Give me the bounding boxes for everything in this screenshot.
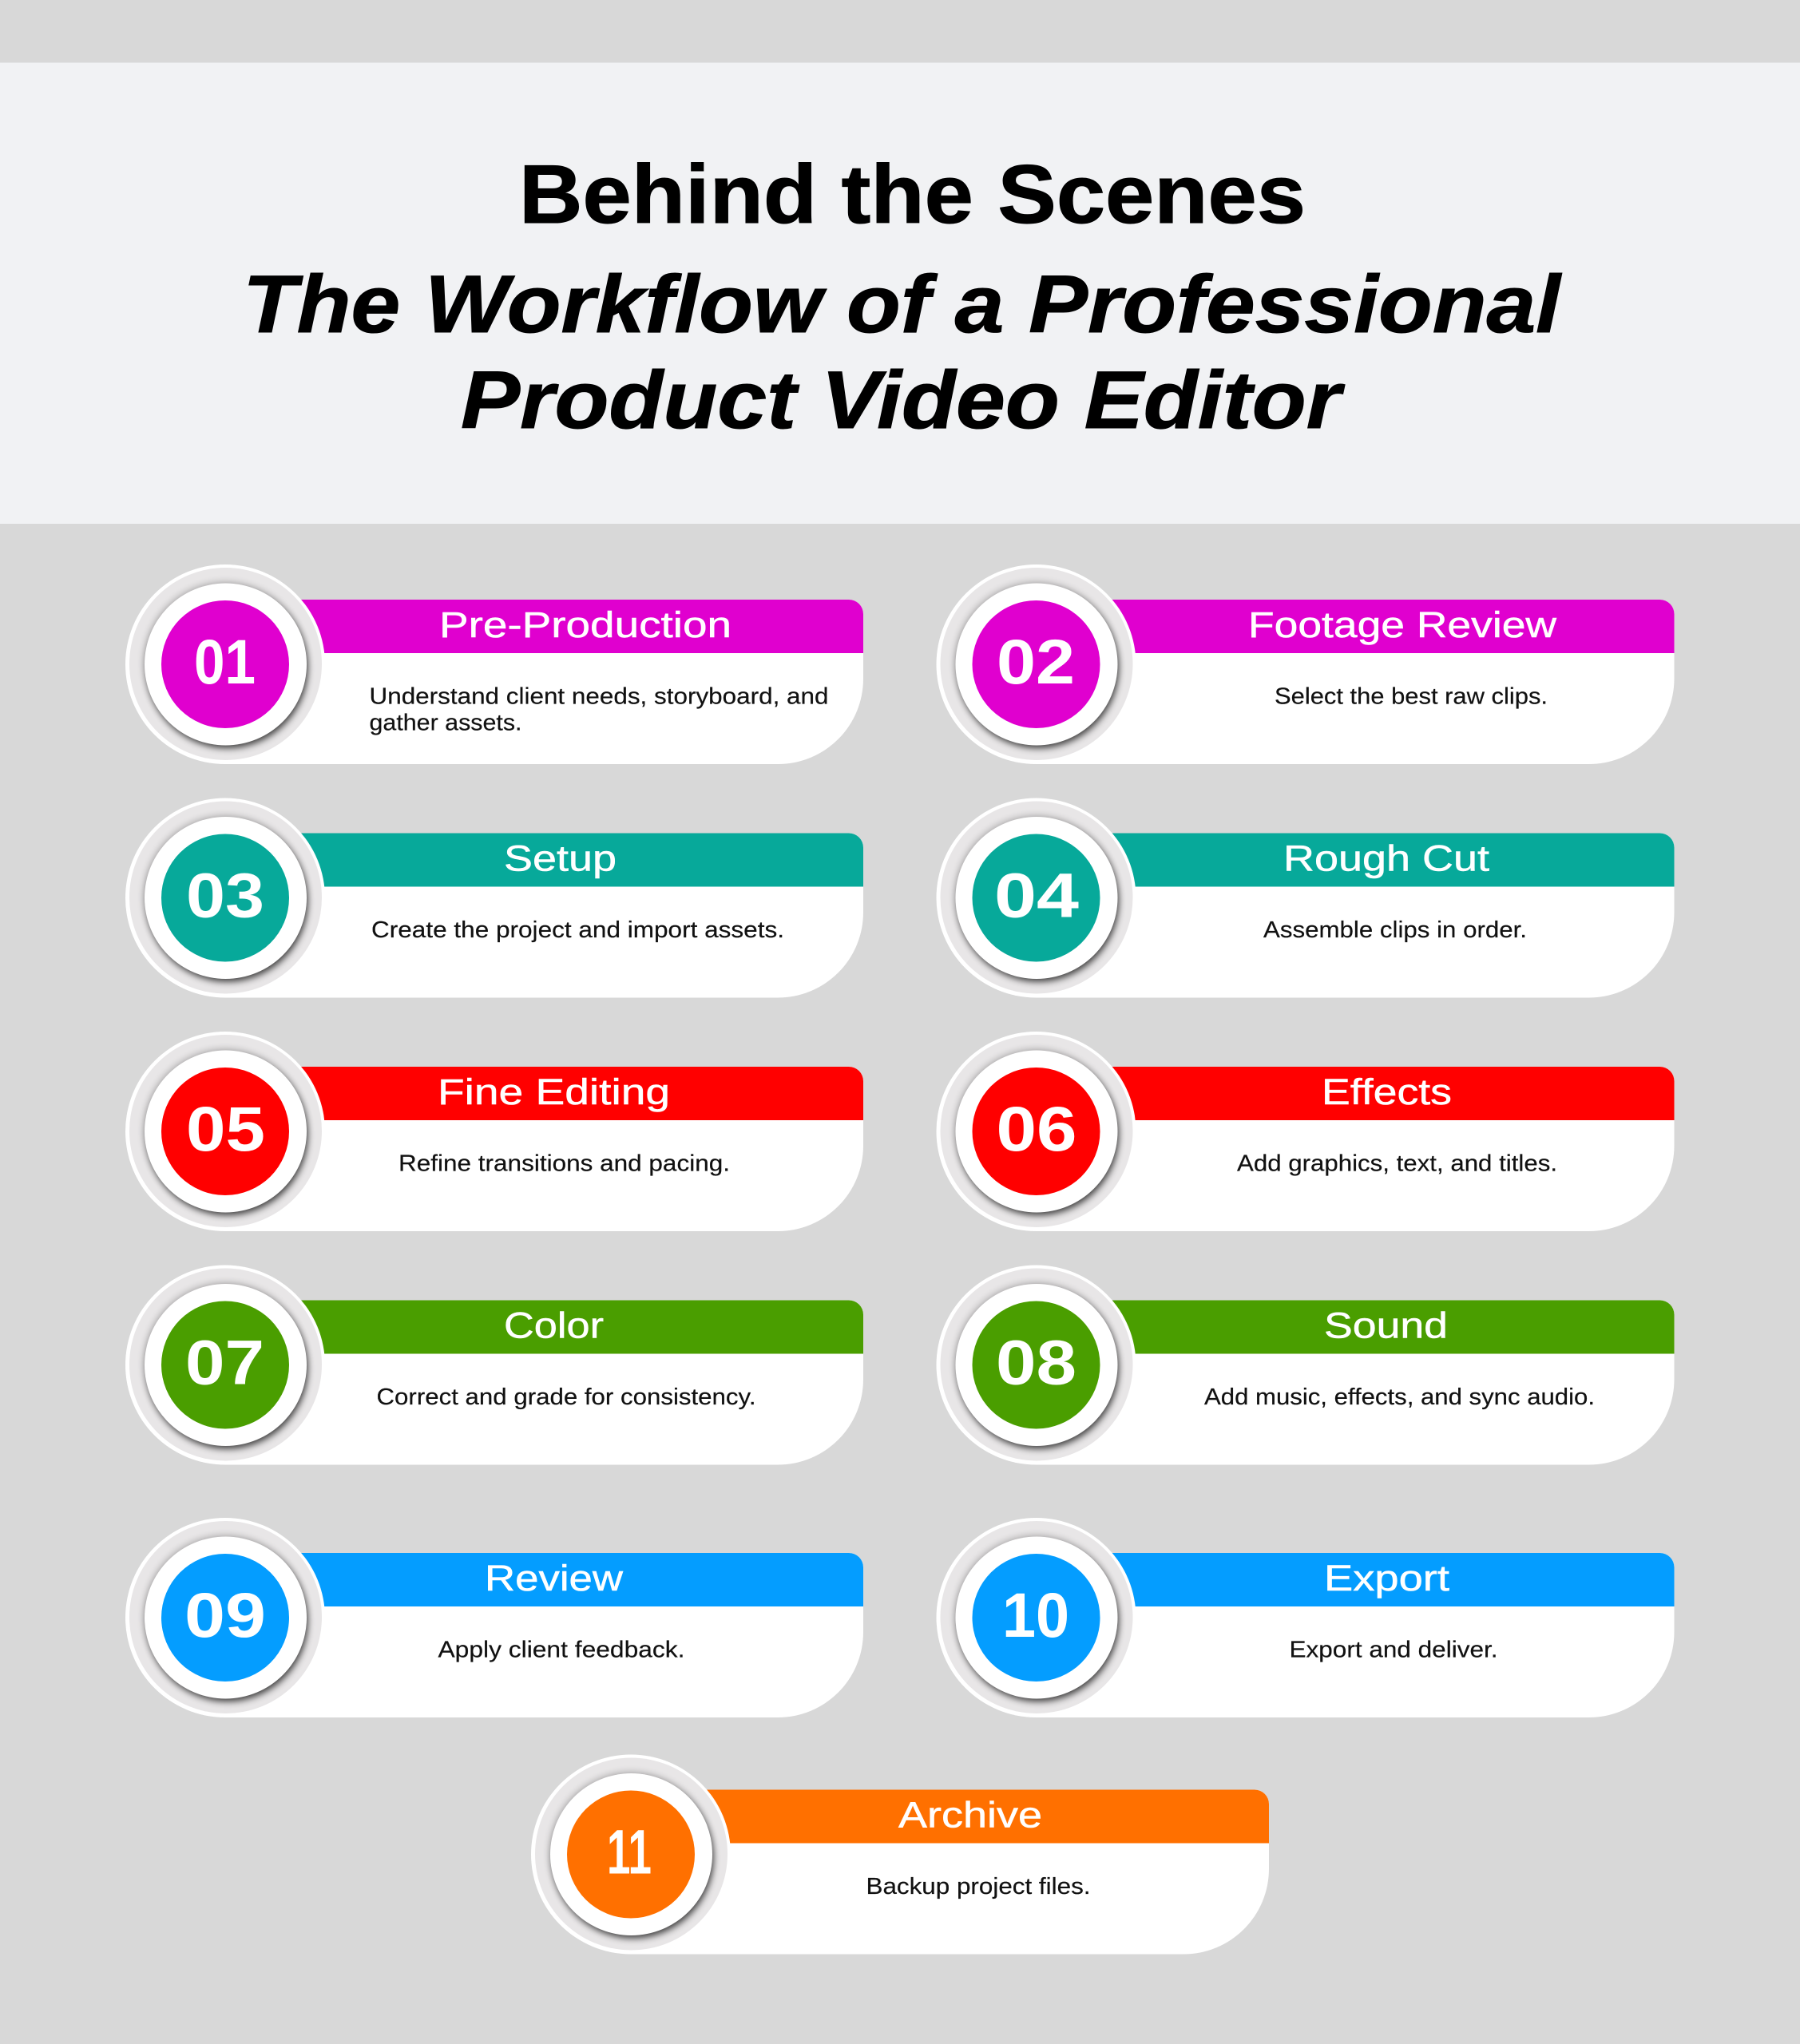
card 01: Pre-Production: 01 bbox=[194, 626, 256, 697]
card title: Archive bbox=[898, 1795, 1042, 1835]
number badge 07 bbox=[161, 1301, 289, 1429]
heading: Behind the Scenes: Behind the Scenes bbox=[519, 149, 1306, 241]
card description: Add graphics, text, and titles. bbox=[1237, 1151, 1557, 1177]
number badge 09 bbox=[161, 1554, 289, 1682]
card 05: Fine Editing: 05 bbox=[186, 1093, 265, 1164]
card title: Pre-Production bbox=[439, 604, 731, 645]
card 06: Effects bbox=[936, 1032, 1674, 1231]
card 09: Review bbox=[125, 1518, 863, 1717]
card 01: Pre-Production bbox=[125, 564, 863, 764]
card 03: Setup: 03 bbox=[186, 859, 264, 931]
number badge 08 bbox=[973, 1301, 1100, 1429]
card 04: Rough Cut: 04 bbox=[994, 859, 1079, 931]
number badge 10 bbox=[973, 1554, 1100, 1682]
card description: Export and deliver. bbox=[1289, 1637, 1498, 1662]
card title: Fine Editing bbox=[438, 1072, 670, 1112]
card description: Understand client needs, storyboard, and bbox=[369, 683, 829, 709]
subheading line 2: Product Video Editor bbox=[461, 355, 1346, 446]
card description: Create the project and import assets. bbox=[371, 917, 784, 943]
card title: Setup bbox=[504, 838, 617, 878]
card 11: Archive: 11 bbox=[607, 1816, 652, 1888]
subheading line 1: The Workflow of a Professional bbox=[243, 259, 1563, 350]
card 08: Sound bbox=[936, 1265, 1674, 1464]
card 04: Rough Cut bbox=[936, 798, 1674, 998]
number badge 03 bbox=[161, 834, 289, 961]
card 02: Footage Review bbox=[936, 564, 1674, 764]
ring 05 bbox=[125, 1032, 325, 1231]
card 11: Archive bbox=[531, 1755, 1269, 1955]
card 05: Fine Editing bbox=[125, 1032, 863, 1231]
header panel bbox=[0, 62, 1800, 524]
card title: Color bbox=[504, 1305, 604, 1346]
card 10: Export: 10 bbox=[1002, 1579, 1069, 1650]
ring 08 bbox=[936, 1265, 1136, 1464]
ring 04 bbox=[936, 798, 1136, 998]
card 07: Color: 07 bbox=[185, 1327, 264, 1397]
number badge 01 bbox=[161, 600, 289, 728]
card description: Assemble clips in order. bbox=[1263, 917, 1527, 943]
card description: Select the best raw clips. bbox=[1275, 683, 1548, 709]
card 07: Color bbox=[125, 1265, 863, 1464]
ring 06 bbox=[936, 1032, 1136, 1231]
number badge 06 bbox=[973, 1068, 1100, 1195]
number badge 04 bbox=[973, 834, 1100, 961]
card title: Review bbox=[485, 1558, 624, 1598]
number badge 02 bbox=[973, 600, 1100, 728]
card description: Refine transitions and pacing. bbox=[398, 1151, 730, 1177]
card description: Add music, effects, and sync audio. bbox=[1204, 1384, 1595, 1410]
card description: Apply client feedback. bbox=[438, 1637, 685, 1662]
card 10: Export bbox=[936, 1518, 1674, 1717]
title bbox=[243, 149, 1563, 446]
card description: gather assets. bbox=[369, 711, 522, 736]
ring 09 bbox=[125, 1518, 325, 1717]
card title: Effects bbox=[1322, 1072, 1452, 1112]
card 09: Review: 09 bbox=[184, 1579, 266, 1650]
card 08: Sound: 08 bbox=[996, 1327, 1076, 1397]
card 03: Setup bbox=[125, 798, 863, 998]
card title: Sound bbox=[1324, 1305, 1448, 1346]
number badge 11 bbox=[567, 1790, 695, 1918]
ring 10 bbox=[936, 1518, 1136, 1717]
card 02: Footage Review: 02 bbox=[997, 626, 1075, 697]
card description bbox=[369, 683, 829, 736]
card title: Footage Review bbox=[1248, 604, 1557, 645]
ring 03 bbox=[125, 798, 325, 998]
ring 11 bbox=[531, 1755, 731, 1955]
ring 02 bbox=[936, 564, 1136, 764]
number badge 05 bbox=[161, 1068, 289, 1195]
card title: Export bbox=[1324, 1558, 1450, 1598]
card 06: Effects: 06 bbox=[997, 1093, 1077, 1164]
ring 01 bbox=[125, 564, 325, 764]
ring 07 bbox=[125, 1265, 325, 1464]
card title: Rough Cut bbox=[1283, 838, 1490, 878]
card description: Backup project files. bbox=[866, 1874, 1091, 1899]
card description: Correct and grade for consistency. bbox=[377, 1384, 755, 1410]
